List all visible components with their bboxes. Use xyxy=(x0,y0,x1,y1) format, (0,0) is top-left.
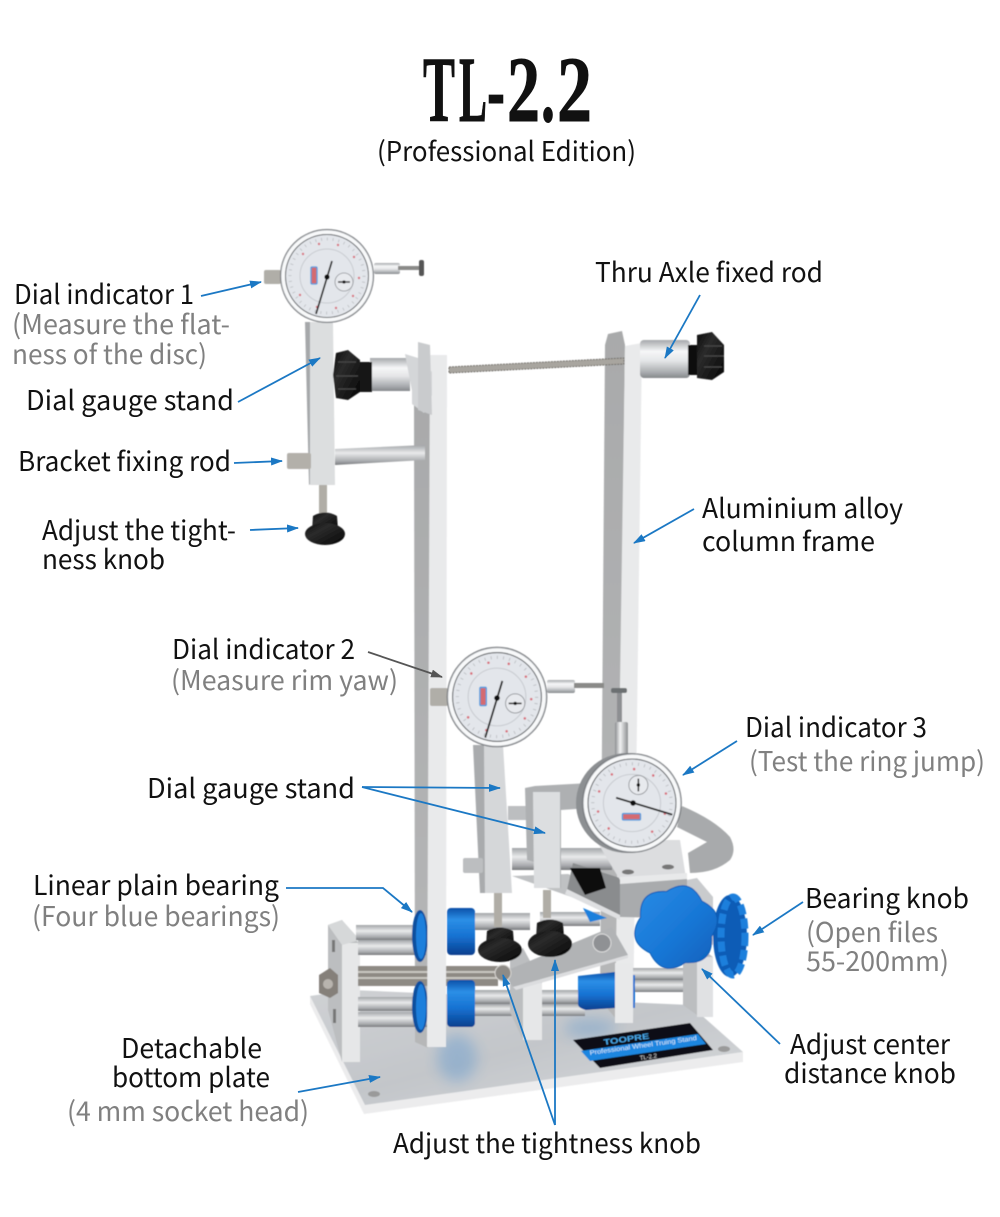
label: thru axle fixed rod: Thru Axle fixed rod xyxy=(595,251,823,290)
label: bearing knob: 55-200mm) xyxy=(806,940,949,979)
label: adjust center distance knob xyxy=(784,1023,956,1091)
dial indicator 2 xyxy=(430,647,604,747)
label: bearing knob: Bearing knob xyxy=(805,877,969,916)
arrows: dial gauge stands xyxy=(362,787,545,833)
label: linear plain bearing: (Four blue bearings) xyxy=(32,895,280,934)
arrow: bearing knob xyxy=(753,902,803,935)
label: adjust the tightness knob xyxy=(42,509,236,577)
arrow: thru axle fixed rod xyxy=(665,295,700,358)
arrow: dial gauge stand xyxy=(238,358,320,402)
horizontal bracket rods xyxy=(463,806,620,920)
label: dial indicator 2 xyxy=(171,628,398,698)
title: . xyxy=(541,39,555,142)
left column gray side xyxy=(414,400,430,1048)
label: bearing knob xyxy=(805,877,969,979)
label: dial gauge stand lower: Dial gauge stand xyxy=(147,767,355,806)
left column front face xyxy=(427,355,447,1047)
title: - xyxy=(487,39,505,142)
arrow: adjust center distance knob xyxy=(702,969,780,1044)
title: 2 xyxy=(507,39,540,142)
threaded axle rod xyxy=(449,358,624,373)
dial 3 mount block xyxy=(596,840,713,945)
arrow: bracket fixing rod xyxy=(234,461,282,463)
label: dial indicator 2: (Measure rim yaw) xyxy=(171,659,398,698)
arrows: adjust tightness knobs xyxy=(503,960,555,1125)
label: linear plain bearing: Linear plain bearing xyxy=(33,864,279,903)
product label sticker xyxy=(573,1023,713,1068)
right end block xyxy=(683,945,713,1017)
label: bearing knob: (Open files xyxy=(806,911,938,950)
label: adjust the tightness knob bottom: Adjust the tightness knob xyxy=(393,1122,701,1161)
lower tightness knob xyxy=(305,485,345,545)
label: aluminium alloy column frame: Aluminium alloy xyxy=(702,487,903,526)
guide rods xyxy=(356,912,695,1027)
rear left end block xyxy=(328,920,360,1062)
label: dial indicator 3 xyxy=(745,706,985,779)
label: dial indicator 3: (Test the ring jump) xyxy=(749,740,985,779)
arrow: dial indicator 3 xyxy=(683,741,737,775)
thru axle clamp with black knob xyxy=(640,332,724,380)
label: dial indicator 2: Dial indicator 2 xyxy=(172,628,355,667)
gauge stand 3 xyxy=(525,783,590,888)
label: adjust center distance knob: Adjust center xyxy=(790,1023,951,1062)
dial indicator 1 xyxy=(264,229,424,323)
gauge stand 2 xyxy=(473,745,512,893)
curved gauge arm xyxy=(677,806,734,873)
label: detachable bottom plate: (4 mm socket head) xyxy=(67,1090,309,1129)
label: aluminium alloy column frame xyxy=(702,487,903,559)
label: dial indicator 1: ness of the disc) xyxy=(12,333,207,372)
label: detachable bottom plate: Detachable xyxy=(121,1027,262,1066)
product illustration: wheel truing stand xyxy=(264,229,747,1114)
arrow: linear plain bearing xyxy=(286,888,412,912)
arrow: adjust tightness knob xyxy=(250,528,298,530)
arrow: detachable bottom plate xyxy=(298,1077,380,1092)
bracket fixing rod xyxy=(287,445,425,469)
product label sticker: Professional Wheel Truing Stand xyxy=(589,1035,698,1057)
product label sticker: TOOPRE xyxy=(603,1032,651,1047)
title: 2 xyxy=(557,39,592,142)
subtitle: (Professional Edition) xyxy=(377,130,636,169)
triangular link plate xyxy=(495,927,628,990)
label: detachable bottom plate: bottom plate xyxy=(112,1056,270,1095)
label: dial gauge stand: Dial gauge stand xyxy=(26,379,234,418)
label: dial indicator 1: (Measure the flat- xyxy=(12,303,230,342)
arrow: dial indicator 2 xyxy=(368,652,442,677)
dial gauge stand 1 xyxy=(305,322,335,485)
label: adjust the tightness knob: Adjust the tight- xyxy=(42,509,236,548)
label: detachable bottom plate xyxy=(67,1027,309,1129)
title: L xyxy=(459,39,487,142)
title: T xyxy=(423,39,455,142)
label: dial indicator 1: Dial indicator 1 xyxy=(14,273,194,312)
base plate xyxy=(310,990,743,1114)
label: linear plain bearing xyxy=(32,864,280,934)
product label sticker: TL-2.2 xyxy=(639,1054,658,1062)
middle support block xyxy=(510,948,542,1040)
small tension knobs xyxy=(478,890,572,962)
label: adjust center distance knob: distance knob xyxy=(784,1052,956,1091)
label: dial indicator 3: Dial indicator 3 xyxy=(745,706,927,745)
label: adjust the tightness knob: ness knob xyxy=(42,538,165,577)
right column lower front xyxy=(615,963,633,1023)
blue bearing knob xyxy=(635,886,747,977)
left end nut xyxy=(319,968,338,998)
dial indicator 3 xyxy=(576,688,682,853)
arrow: dial indicator 1 xyxy=(201,282,261,296)
right column xyxy=(600,331,642,1023)
arrow: aluminium column xyxy=(634,509,694,543)
upper black knob and barrel xyxy=(333,342,432,415)
label: dial indicator 1 xyxy=(12,273,230,372)
four blue linear bearings xyxy=(412,908,635,1033)
title xyxy=(423,39,592,142)
label: bracket fixing rod: Bracket fixing rod xyxy=(18,440,231,479)
label: aluminium alloy column frame: column frame xyxy=(702,520,875,559)
